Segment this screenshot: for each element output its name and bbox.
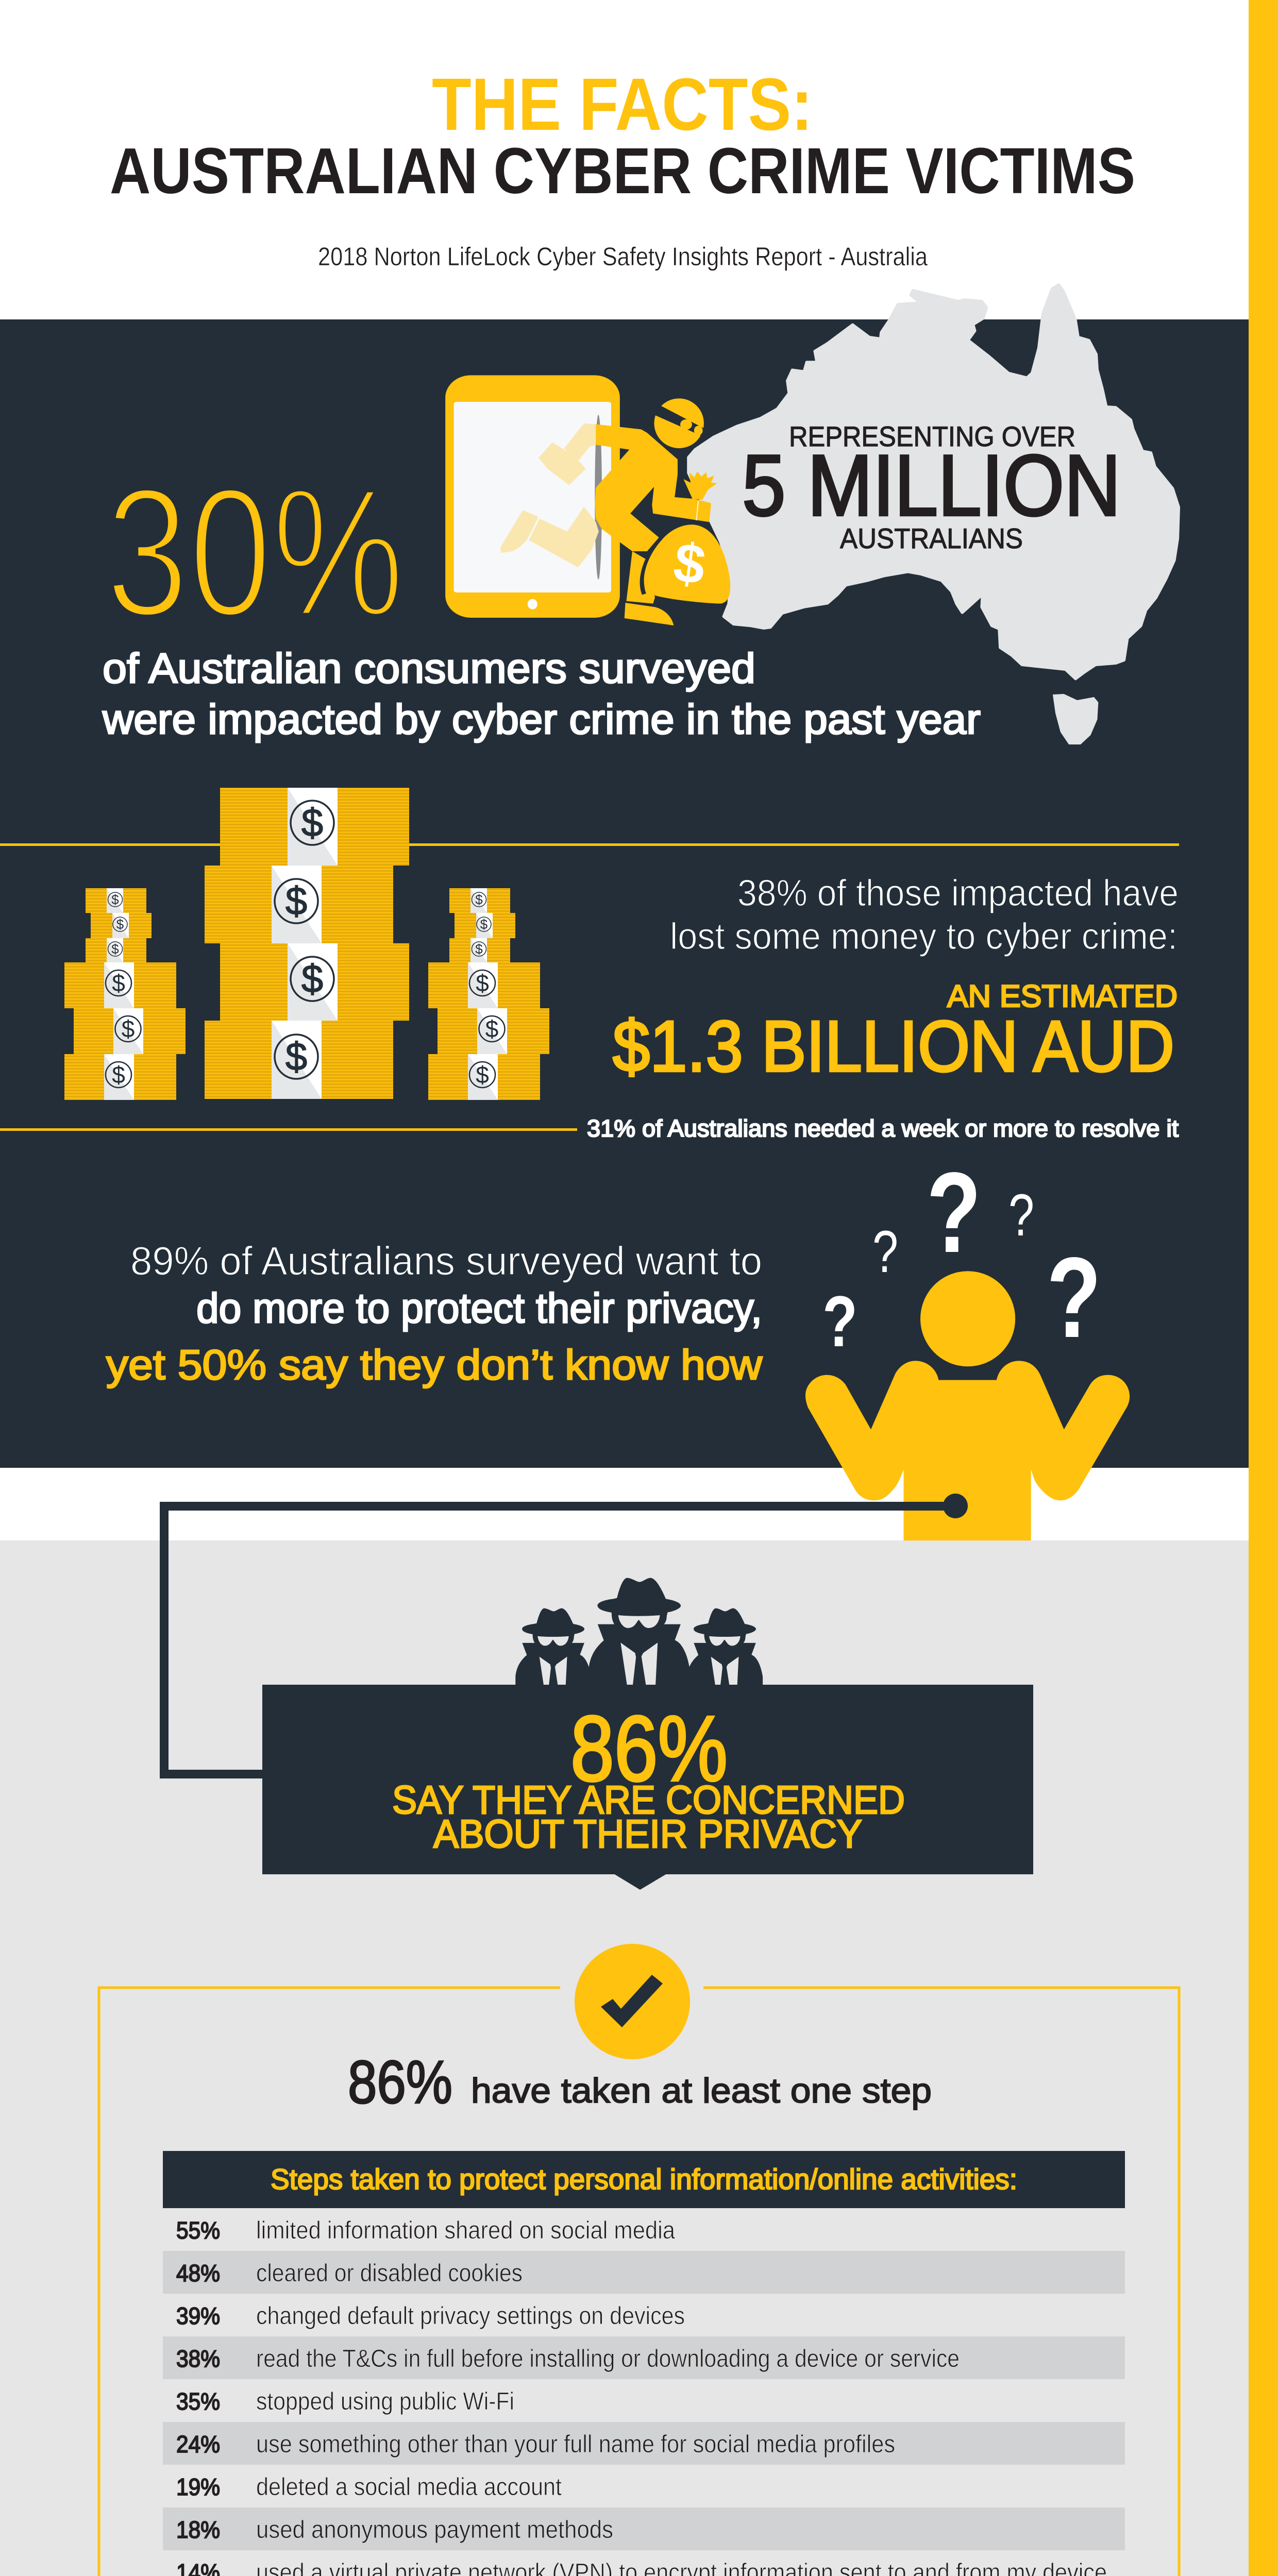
left stack bbox=[64, 888, 186, 1100]
connector line from person to 86% box bbox=[160, 1494, 968, 1778]
right stack: $ bbox=[476, 970, 489, 996]
title line 1: THE FACTS: bbox=[432, 63, 813, 146]
box background bbox=[262, 1685, 1033, 1874]
row labels: stopped using public Wi-Fi bbox=[256, 2388, 514, 2415]
thief head bbox=[654, 398, 704, 448]
dollar sign on bag: $ bbox=[670, 530, 709, 597]
thief foot bbox=[625, 603, 674, 625]
right stack: $ bbox=[485, 1015, 498, 1042]
money bag outline bbox=[642, 522, 693, 594]
right stack: $ bbox=[476, 1061, 489, 1088]
right stack: $ bbox=[475, 941, 483, 957]
thief mask bbox=[654, 405, 704, 437]
thief ghost parts inside phone bbox=[500, 423, 599, 568]
impacted line 2: were impacted by cyber crime in the past year bbox=[102, 696, 981, 743]
stat: 86% bbox=[348, 2048, 452, 2116]
heading: 86% have taken a step bbox=[348, 2048, 932, 2116]
icon: Australia mainland bbox=[688, 284, 1179, 679]
title line 2: AUSTRALIAN CYBER CRIME VICTIMS bbox=[110, 134, 1135, 207]
divider line top bbox=[0, 843, 1179, 846]
centre stack: $ bbox=[301, 801, 323, 845]
row labels: deleted a social media account bbox=[256, 2473, 562, 2501]
concerned line 2: ABOUT THEIR PRIVACY bbox=[433, 1812, 862, 1856]
table: steps taken bbox=[163, 2151, 1125, 2576]
icon: check circle bbox=[575, 1944, 690, 2059]
left stack: $ bbox=[111, 941, 119, 957]
panel: dark impact section background bbox=[0, 319, 1249, 1468]
stolen money in hand bbox=[683, 471, 717, 500]
panel: steps outline bbox=[99, 1988, 1179, 2576]
text block: money lost bbox=[587, 873, 1179, 1142]
right stack bbox=[428, 888, 549, 1100]
row percentages: 48% bbox=[176, 2260, 220, 2286]
phone body bbox=[445, 375, 620, 618]
icon: stacks of money bbox=[64, 788, 549, 1100]
impacted line 1: of Australian consumers surveyed bbox=[103, 645, 755, 692]
row percentages: 24% bbox=[176, 2431, 220, 2458]
privacy line 2: do more to protect their privacy, bbox=[196, 1285, 762, 1332]
question marks: ? bbox=[822, 1281, 857, 1362]
stat 86%: 86% bbox=[570, 1697, 728, 1801]
table header text: Steps taken to protect personal information/online activities: bbox=[271, 2163, 1017, 2195]
person figure bbox=[805, 1271, 1130, 1540]
callout: Australians: AUSTRALIANS bbox=[840, 522, 1023, 554]
row labels: use something other than your full name for social media profiles bbox=[256, 2431, 895, 2458]
thief glasses bbox=[680, 419, 692, 430]
divider line bottom bbox=[0, 1128, 577, 1131]
centre stack bbox=[205, 788, 409, 1099]
privacy line 3: yet 50% say they don’t know how bbox=[106, 1342, 763, 1388]
row percentages: 35% bbox=[176, 2388, 220, 2415]
row labels: changed default privacy settings on devices bbox=[256, 2302, 685, 2330]
left stack: $ bbox=[112, 1061, 125, 1088]
money line 2: lost some money to cyber crime: bbox=[670, 916, 1178, 957]
question marks: ? bbox=[872, 1219, 898, 1285]
phone with thief illustration bbox=[445, 375, 730, 625]
resolve time: 31% of Australians needed a week or more to resolve it bbox=[587, 1115, 1179, 1142]
text block: protect privacy bbox=[106, 1238, 763, 1388]
right yellow stripe bbox=[1249, 0, 1278, 2576]
arrow: box pointer bbox=[614, 1874, 667, 1890]
centre stack: $ bbox=[285, 1035, 307, 1079]
row labels: cleared or disabled cookies bbox=[256, 2260, 523, 2287]
icon: phone and thief bbox=[445, 375, 730, 625]
right stack: $ bbox=[480, 917, 488, 932]
question marks: ? bbox=[927, 1149, 981, 1277]
icon: Tasmania bbox=[1053, 694, 1098, 744]
question marks: ? bbox=[1047, 1234, 1101, 1362]
callout: representing over: REPRESENTING OVER bbox=[789, 420, 1075, 452]
row percentages: 38% bbox=[176, 2345, 220, 2372]
row percentages: 18% bbox=[176, 2516, 220, 2543]
row labels: limited information shared on social media bbox=[256, 2217, 675, 2244]
callout: 5 million: 5 MILLION bbox=[742, 437, 1121, 534]
panel: grey privacy section background bbox=[0, 1540, 1249, 2576]
big stat: 30%: 30% bbox=[106, 450, 405, 655]
concerned line 1: SAY THEY ARE CONCERNED bbox=[392, 1778, 905, 1822]
1.3 billion figure: $1.3 BILLION AUD bbox=[613, 1006, 1174, 1087]
icon: confused person with question marks bbox=[805, 1149, 1130, 1540]
right stack: $ bbox=[475, 892, 483, 907]
table header bbox=[163, 2151, 1125, 2208]
row labels: read the T&Cs in full before installing or downloading a device or service bbox=[256, 2345, 960, 2372]
question marks bbox=[822, 1149, 1101, 1362]
row labels: used anonymous payment methods bbox=[256, 2516, 613, 2544]
left stack: $ bbox=[111, 892, 119, 907]
an estimated: AN ESTIMATED bbox=[947, 979, 1178, 1013]
centre stack: $ bbox=[301, 957, 323, 1001]
map of Australia with callout bbox=[688, 284, 1179, 744]
slit in screen bbox=[595, 415, 602, 580]
money bag bbox=[644, 524, 730, 604]
centre stack: $ bbox=[285, 879, 307, 923]
phone home button bbox=[528, 599, 537, 609]
row percentages: 19% bbox=[176, 2473, 220, 2500]
thief body bbox=[595, 424, 711, 604]
phone screen bbox=[454, 402, 611, 592]
row percentages: 55% bbox=[176, 2217, 220, 2244]
left stack: $ bbox=[112, 970, 125, 996]
row percentages bbox=[176, 2217, 220, 2576]
icon: three spies bbox=[515, 1578, 763, 1697]
privacy line 1: 89% of Australians surveyed want to bbox=[130, 1238, 762, 1283]
title block bbox=[110, 63, 1135, 271]
row labels bbox=[256, 2217, 1107, 2576]
panel: 86% concerned box bbox=[262, 1685, 1033, 1890]
money line 1: 38% of those impacted have bbox=[737, 873, 1179, 914]
row stripes bbox=[163, 2251, 1125, 2576]
left stack: $ bbox=[122, 1015, 134, 1042]
left stack: $ bbox=[116, 917, 124, 932]
headline text: impacted bbox=[102, 645, 981, 743]
label: have taken at least one step bbox=[471, 2071, 932, 2110]
subtitle: 2018 Norton LifeLock Cyber Safety Insights Report - Australia bbox=[318, 242, 928, 271]
row percentages: 39% bbox=[176, 2302, 220, 2329]
question marks: ? bbox=[1008, 1182, 1034, 1248]
